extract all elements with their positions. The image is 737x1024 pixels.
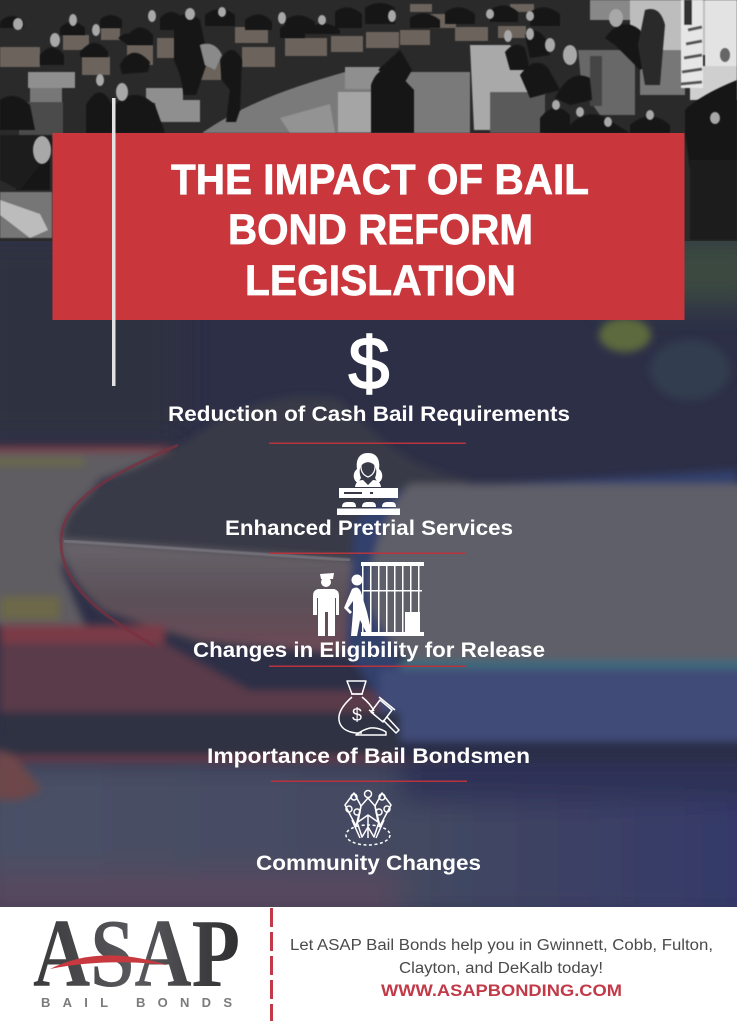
call to action text: Let ASAP Bail Bonds help you in Gwinnett, Cobb, Fulton, bbox=[290, 937, 713, 954]
speaker dais and clerk table bbox=[470, 45, 550, 130]
footer bbox=[0, 900, 737, 1024]
icon: money bag and gavel bbox=[339, 681, 399, 735]
title text: THE IMPACT OF BAIL bbox=[171, 156, 589, 204]
title text: LEGISLATION bbox=[245, 257, 516, 305]
photo: legislative chamber bbox=[0, 0, 737, 241]
seated members bbox=[0, 16, 24, 28]
dashed divider bbox=[270, 908, 273, 1021]
item: enhanced pretrial services bbox=[225, 453, 513, 540]
icon: officer and person at jail cell bbox=[313, 562, 424, 636]
title text bbox=[171, 156, 589, 305]
item: community changes: Community Changes bbox=[256, 852, 481, 875]
desks bbox=[0, 4, 534, 80]
item: enhanced pretrial services: Enhanced Pretrial Services bbox=[225, 517, 513, 540]
left foreground desk bbox=[0, 192, 52, 238]
walls and light columns bbox=[630, 0, 737, 55]
title banner bbox=[52, 133, 684, 320]
item: importance of bail bondsmen: Importance of Bail Bondsmen bbox=[207, 745, 530, 768]
chamber floor bbox=[202, 72, 470, 133]
heads bbox=[13, 7, 730, 164]
call to action text bbox=[290, 937, 713, 1000]
item: changes in eligibility for release bbox=[193, 562, 545, 662]
icon: dollar sign: $ bbox=[348, 322, 390, 405]
call to action text: Clayton, and DeKalb today! bbox=[399, 960, 603, 977]
icon: money bag and gavel: $ bbox=[352, 705, 362, 725]
flag bbox=[681, 0, 703, 88]
title text: BOND REFORM bbox=[228, 206, 533, 254]
icon: judge at bench bbox=[337, 453, 400, 515]
item: reduction of cash bail requirements: Reduction of Cash Bail Requirements bbox=[168, 403, 570, 426]
background: blurred law book photo bbox=[0, 235, 737, 920]
logo: ASAP Bail Bonds: BAIL BONDS bbox=[41, 995, 232, 1010]
item: reduction of cash bail requirements bbox=[168, 322, 570, 426]
call to action text: WWW.ASAPBONDING.COM bbox=[381, 981, 622, 1000]
icon: community raised hands bbox=[345, 790, 391, 845]
item: community changes bbox=[256, 790, 481, 875]
standing men bbox=[174, 14, 208, 95]
logo: ASAP Bail Bonds: ASAP bbox=[33, 900, 240, 1008]
item: importance of bail bondsmen bbox=[207, 681, 530, 768]
vertical white accent bar bbox=[112, 98, 116, 386]
item: changes in eligibility for release: Changes in Eligibility for Release bbox=[193, 639, 545, 662]
